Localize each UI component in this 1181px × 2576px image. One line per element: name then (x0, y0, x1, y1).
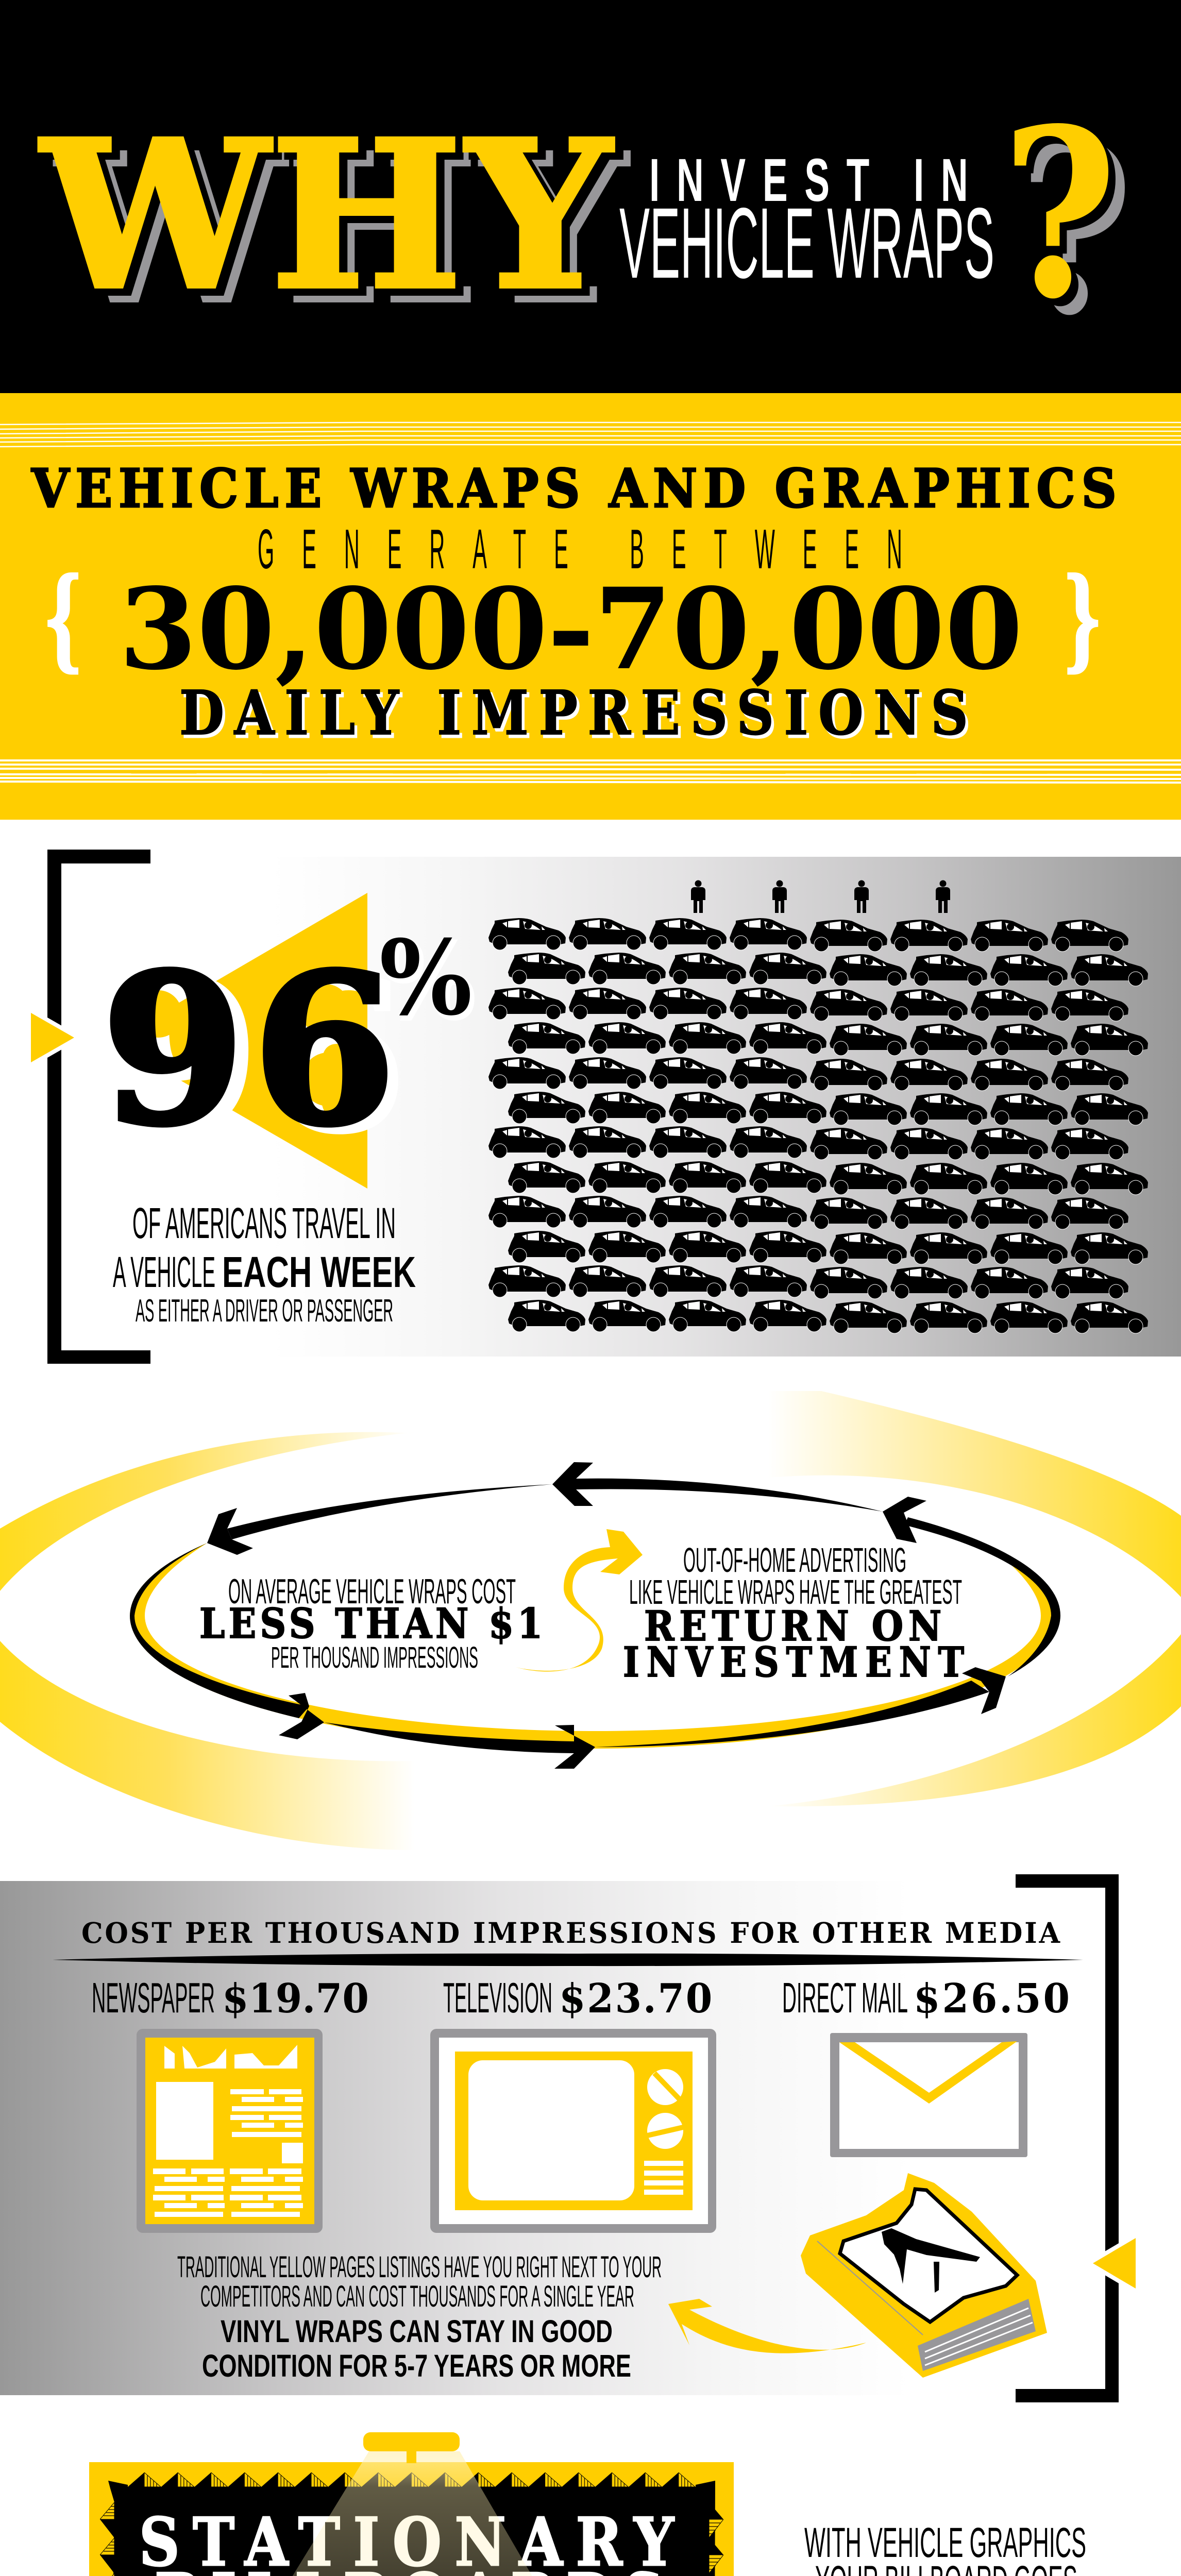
bracket (1016, 1874, 1119, 2402)
yellow triangle (113, 893, 367, 1189)
panel: 96 percent: A VEHICLE (113, 1248, 215, 1296)
text: less than $1: LESS THAN $1 (199, 1599, 543, 1648)
title: invest in: INVEST IN (649, 146, 968, 214)
percent sign: % (382, 921, 476, 1042)
heading: vehicle wraps and graphics: VEHICLE WRAPS AND GRAPHICS (31, 457, 1117, 520)
icon: television (430, 2029, 716, 2233)
light beam (155, 2451, 663, 2576)
arrow ring (130, 1479, 1060, 1753)
header panel (0, 0, 1181, 393)
s-curve arrow (516, 1529, 643, 1672)
pointer triangle (29, 1009, 78, 1066)
title: WHY: WHY (38, 96, 615, 334)
divider bar (53, 1954, 1083, 1966)
billboard lamp (363, 2432, 460, 2463)
icons: people (691, 880, 950, 913)
panel: return on investment cycle (0, 1391, 1181, 1850)
yellow swooshes (0, 1391, 1181, 1850)
text: each week: EACH WEEK (222, 1248, 416, 1296)
price: direct mail: $26.50 (914, 1975, 1070, 2022)
panel: cost per thousand impressions: COMPETITORS AND CAN COST THOUSANDS FOR A SINGLE YEAR (200, 2280, 634, 2313)
arrow: book to text (668, 2299, 866, 2353)
panel: daily impressions (0, 393, 1181, 820)
panel: return on investment cycle: ON AVERAGE VEHICLE WRAPS COST (228, 1572, 516, 1611)
heading: daily impressions: DAILY IMPRESSIONS (182, 680, 971, 752)
price: newspaper: $19.70 (222, 1975, 369, 2022)
pointer triangle (1089, 2234, 1138, 2292)
text: return on: RETURN ON (644, 1602, 941, 1650)
panel: cost per thousand impressions (0, 1874, 1181, 2402)
text: condition: CONDITION FOR 5-7 YEARS OR MORE (202, 2348, 631, 2383)
icon: newspaper (137, 2029, 323, 2233)
panel: cost per thousand impressions: DIRECT MAIL (782, 1974, 908, 2022)
arrowheads (207, 1462, 1006, 1769)
bracket (47, 850, 150, 1364)
stat: 96: 96 (102, 929, 396, 1171)
panel: return on investment cycle: OUT-OF-HOME ADVERTISING (683, 1541, 906, 1580)
title: WHY: WHY (45, 102, 622, 341)
text: vinyl wraps: VINYL WRAPS CAN STAY IN GOOD (221, 2314, 613, 2349)
stat: 96: 96 (116, 936, 407, 1178)
yellow crescent (130, 1543, 1056, 1749)
text: generate between: GENERATE BETWEEN (258, 518, 902, 581)
icon: question mark: ? (1018, 95, 1134, 367)
icon: question mark: ? (1002, 78, 1117, 350)
panel: cost per thousand impressions: TELEVISION (443, 1974, 552, 2022)
panel: 96 percent: OF AMERICANS TRAVEL IN (132, 1199, 396, 1247)
right brace: } (1065, 550, 1100, 684)
icons: car grid (488, 918, 1148, 1333)
panel: stationary billboards (0, 2432, 1181, 2576)
icon: yellow pages book (801, 2173, 1047, 2378)
percent sign: % (379, 918, 473, 1039)
billboard board (89, 2451, 734, 2576)
panel: return on investment cycle: PER THOUSAND IMPRESSIONS (271, 1641, 478, 1674)
text: investment: INVESTMENT (623, 1638, 964, 1686)
left brace: { (45, 550, 81, 684)
heading: COST PER THOUSAND IMPRESSIONS FOR OTHER MEDIA (81, 1917, 1060, 1950)
big number: 30,000-70,000 (119, 564, 1023, 695)
price: television: $23.70 (559, 1975, 712, 2022)
icon: question mark: ? (1009, 86, 1124, 358)
panel: 96 percent (0, 850, 1181, 1364)
icon: envelope (830, 2033, 1027, 2157)
panel: 96 percent: AS EITHER A DRIVER OR PASSENGER (136, 1293, 393, 1329)
title: WHY: WHY (54, 110, 631, 348)
panel: cost per thousand impressions: NEWSPAPER (92, 1974, 215, 2022)
heading: daily impressions: DAILY IMPRESSIONS (179, 677, 968, 749)
